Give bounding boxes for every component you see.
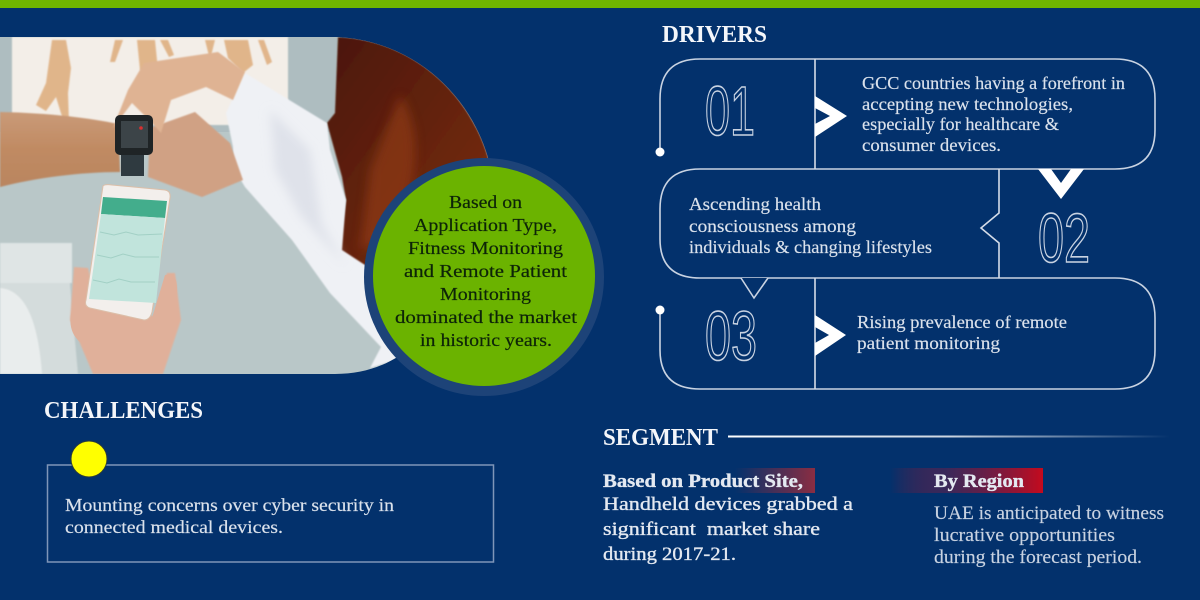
speech tail [741,278,768,298]
text block: by region: UAE is anticipated to witness [934,504,1164,524]
dividers [815,59,999,389]
driver 2 text: consciousness among [689,216,856,236]
arrow: driver 3 to text [815,315,846,356]
arrow: driver 1 to text [815,96,847,137]
phone [86,185,170,320]
driver 1 text [862,73,1125,155]
text block: by region: By Region [934,471,1024,492]
driver 2 text [689,194,932,257]
driver 2 text: Ascending health [689,194,821,214]
driver 1 text: GCC countries having a forefront in [862,73,1125,93]
text block: by region [890,468,1164,568]
driver 3 text [857,312,1067,353]
heading: challenges: CHALLENGES [44,398,203,424]
text block: product site: during 2017-21. [603,544,736,565]
text block: product site: Based on Product Site, [603,471,803,492]
fingers over phone [70,275,177,342]
driver 1 text: consumer devices. [862,135,1001,155]
serpentine outline [660,59,1155,389]
poster [12,37,288,125]
callout: application type: Monitoring [440,284,531,304]
photo: smartwatch and phone health monitoring [0,37,500,377]
callout: application type: Based on [449,192,522,212]
driver 1 text: especially for healthcare & [862,114,1059,134]
driver 3 text: patient monitoring [857,333,1000,353]
panel: challenges: Mounting concerns over cyber security in [65,495,394,515]
callout: application type [364,158,604,396]
callout: application type: and Remote Patient [404,261,567,281]
text block: product site: Handheld devices grabbed a [603,494,854,515]
watch [121,155,144,176]
poster figures [36,40,272,123]
upper hand [113,52,245,133]
driver 1 text: accepting new technologies, [862,94,1073,114]
furniture [0,243,78,374]
panel: challenges: connected medical devices. [65,517,283,537]
callout: application type: Fitness Monitoring [408,238,563,258]
end dot [656,306,664,314]
text block: by region: lucrative opportunities [934,526,1115,546]
white coat [226,73,405,368]
callout: application type: Application Type, [414,215,557,235]
arrow: driver 1 to 2 [1038,169,1084,199]
text block: by region: during the forecast period. [934,548,1142,568]
forearm [0,112,120,187]
hair [327,37,492,267]
heading: drivers: DRIVERS [662,22,767,48]
start dot [656,148,664,156]
callout: application type: dominated the market [395,307,577,327]
number 03: 03 [705,297,757,375]
panel: challenges [48,441,494,562]
wrist and fist [148,112,243,197]
heading: segment: SEGMENT [603,425,718,451]
phone screen [101,197,167,218]
driver 3 text: Rising prevalence of remote [857,312,1067,332]
lower hand [70,267,181,374]
driver 2 text: individuals & changing lifestyles [689,237,932,257]
text block: product site: significant market share [603,519,820,540]
callout: application type: in historic years. [420,330,552,350]
top green bar [0,0,1200,8]
number 02: 02 [1038,199,1090,277]
text block: product site [603,468,854,565]
number 01: 01 [705,72,755,150]
icon: yellow dot [71,441,107,477]
panel: drivers flow [656,59,1155,389]
